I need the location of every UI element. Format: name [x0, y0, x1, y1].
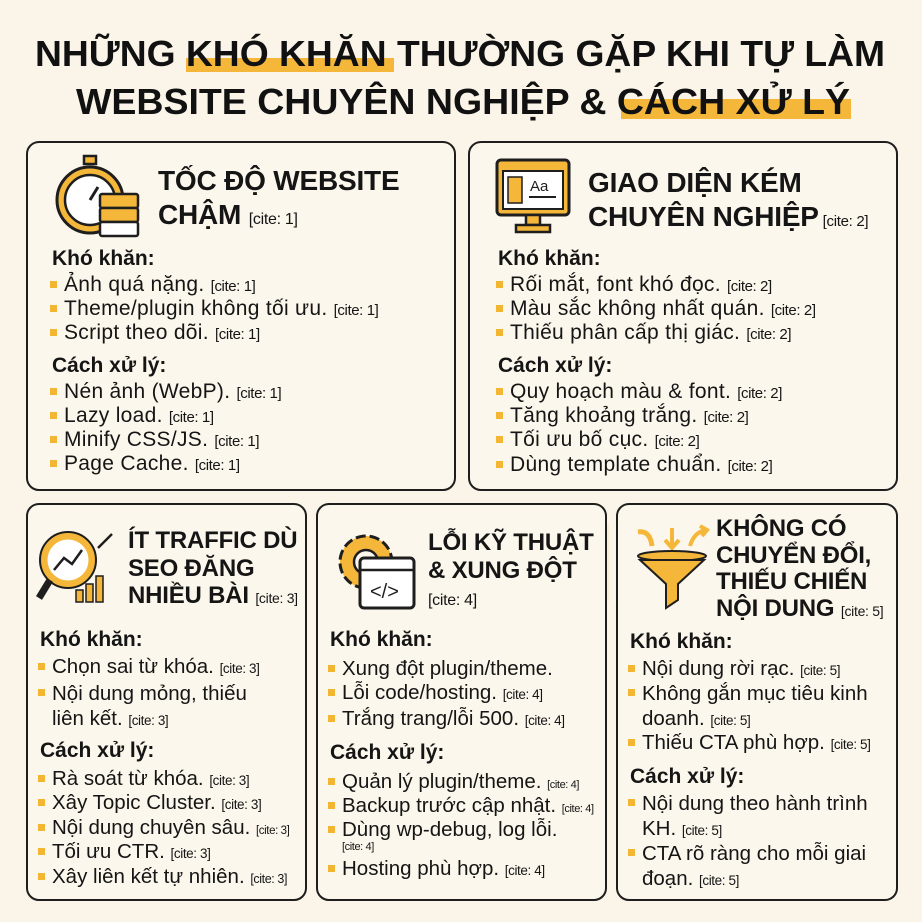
- text block: lỗi kỹ thuật: Lỗi code/hosting. [cite: 4]: [342, 681, 543, 704]
- icon: monitor: [496, 158, 570, 234]
- text block: tốc độ: Khó khăn:: [52, 247, 155, 270]
- text block: tốc độ: Page Cache. [cite: 1]: [64, 452, 240, 475]
- icon: monitor: Aa: [530, 178, 549, 195]
- text block: giao diện: Tối ưu bố cục. [cite: 2]: [510, 428, 699, 451]
- text block: chuyển đổi: [628, 630, 870, 890]
- text block: giao diện: Màu sắc không nhất quán. [cite: 2]: [510, 297, 816, 320]
- text block: giao diện: Tăng khoảng trắng. [cite: 2]: [510, 404, 748, 427]
- text block: chuyển đổi: KH. [cite: 5]: [642, 817, 722, 840]
- heading: traffic: [128, 526, 298, 609]
- heading: giao diện: GIAO DIỆN KÉM: [588, 167, 802, 198]
- text block: giao diện: Khó khăn:: [498, 247, 601, 270]
- text block: chuyển đổi: CTA rõ ràng cho mỗi giai: [642, 842, 866, 865]
- text block: traffic: Cách xử lý:: [40, 739, 154, 762]
- text block: lỗi kỹ thuật: Hosting phù hợp. [cite: 4]: [342, 857, 545, 880]
- text block: giao diện: Rối mắt, font khó đọc. [cite: 2]: [510, 273, 772, 296]
- text block: lỗi kỹ thuật: Dùng wp-debug, log lỗi.: [342, 818, 557, 841]
- text block: traffic: liên kết. [cite: 3]: [52, 707, 168, 730]
- text block: chuyển đổi: Thiếu CTA phù hợp. [cite: 5]: [642, 731, 870, 754]
- text block: traffic: [38, 628, 289, 888]
- text block: chuyển đổi: Khó khăn:: [630, 630, 733, 653]
- heading: giao diện: CHUYÊN NGHIỆP [cite: 2]: [588, 201, 868, 232]
- text block: lỗi kỹ thuật: Khó khăn:: [330, 628, 433, 651]
- panel: tốc độ: [26, 141, 456, 491]
- text block: traffic: Rà soát từ khóa. [cite: 3]: [52, 767, 249, 790]
- text block: chuyển đổi: đoạn. [cite: 5]: [642, 867, 739, 890]
- heading: traffic: NHIỀU BÀI [cite: 3]: [128, 582, 298, 609]
- text block: lỗi kỹ thuật: [328, 628, 594, 880]
- heading: lỗi kỹ thuật: [cite: 4]: [428, 592, 477, 609]
- text block: lỗi kỹ thuật: Backup trước cập nhật. [cite: 4]: [342, 794, 594, 817]
- text block: chuyển đổi: Nội dung rời rạc. [cite: 5]: [642, 657, 840, 680]
- text block: chuyển đổi: Nội dung theo hành trình: [642, 792, 868, 815]
- watermark: LIGHT: [330, 502, 700, 625]
- heading: lỗi kỹ thuật: LỖI KỸ THUẬT: [428, 529, 594, 556]
- text block: lỗi kỹ thuật: Quản lý plugin/theme. [cite: 4]: [342, 770, 579, 793]
- panel: giao diện: [468, 141, 898, 491]
- text block: giao diện: Quy hoạch màu & font. [cite: 2]: [510, 380, 782, 403]
- heading: chuyển đổi: CHUYỂN ĐỔI,: [716, 542, 871, 568]
- text block: tốc độ: Script theo dõi. [cite: 1]: [64, 321, 260, 344]
- heading: traffic: SEO ĐĂNG: [128, 554, 254, 582]
- panel: traffic: [26, 503, 307, 901]
- heading: chuyển đổi: KHÔNG CÓ: [716, 515, 846, 542]
- text block: tốc độ: Minify CSS/JS. [cite: 1]: [64, 428, 259, 451]
- text block: tốc độ: Lazy load. [cite: 1]: [64, 404, 214, 427]
- text block: tốc độ: Ảnh quá nặng. [cite: 1]: [64, 273, 255, 296]
- heading: tốc độ: TỐC ĐỘ WEBSITE: [158, 165, 399, 196]
- text block: traffic: Tối ưu CTR. [cite: 3]: [52, 840, 210, 863]
- heading: chuyển đổi: [716, 514, 883, 622]
- text block: chuyển đổi: Cách xử lý:: [630, 765, 744, 788]
- text block: lỗi kỹ thuật: [cite: 4]: [342, 841, 374, 853]
- text block: traffic: Nội dung chuyên sâu. [cite: 3]: [52, 816, 289, 839]
- text block: chuyển đổi: doanh. [cite: 5]: [642, 707, 750, 730]
- heading: lỗi kỹ thuật: & XUNG ĐỘT: [428, 556, 577, 584]
- title: [35, 32, 885, 122]
- text block: giao diện: [496, 247, 816, 476]
- heading: tốc độ: [158, 165, 399, 230]
- text block: giao diện: Thiếu phân cấp thị giác. [cite: 2]: [510, 321, 791, 344]
- text block: tốc độ: Cách xử lý:: [52, 354, 166, 377]
- text block: lỗi kỹ thuật: Cách xử lý:: [330, 741, 444, 764]
- icon: gear code: </>: [370, 581, 399, 603]
- text block: traffic: Chọn sai từ khóa. [cite: 3]: [52, 655, 260, 678]
- heading: giao diện: [588, 167, 868, 232]
- icon: gear code: [338, 534, 416, 610]
- panel: lỗi kỹ thuật: [316, 503, 607, 901]
- title: NHỮNG KHÓ KHĂN THƯỜNG GẶP KHI TỰ LÀM: [35, 32, 885, 74]
- text block: traffic: Xây Topic Cluster. [cite: 3]: [52, 791, 261, 814]
- icon: funnel: [637, 524, 710, 610]
- panel: chuyển đổi: [616, 503, 898, 901]
- text block: traffic: Xây liên kết tự nhiên. [cite: 3]: [52, 865, 287, 888]
- text block: traffic: Khó khăn:: [40, 628, 143, 651]
- heading: traffic: ÍT TRAFFIC DÙ: [128, 527, 297, 554]
- text block: tốc độ: [50, 247, 378, 475]
- icon: stopwatch: [56, 154, 140, 238]
- title: WEBSITE CHUYÊN NGHIỆP & CÁCH XỬ LÝ: [76, 80, 850, 122]
- heading: chuyển đổi: NỘI DUNG [cite: 5]: [716, 594, 883, 622]
- text block: giao diện: Dùng template chuẩn. [cite: 2]: [510, 453, 772, 476]
- text block: giao diện: Cách xử lý:: [498, 354, 612, 377]
- text block: lỗi kỹ thuật: Xung đột plugin/theme.: [342, 657, 553, 680]
- text block: traffic: Nội dung mỏng, thiếu: [52, 682, 247, 705]
- text block: tốc độ: Theme/plugin không tối ưu. [cite: 1]: [64, 297, 378, 320]
- heading: lỗi kỹ thuật: [428, 528, 594, 609]
- heading: tốc độ: CHẬM [cite: 1]: [158, 199, 298, 230]
- icon: magnifier chart: [36, 531, 113, 603]
- text block: tốc độ: Nén ảnh (WebP). [cite: 1]: [64, 380, 281, 403]
- text block: chuyển đổi: Không gắn mục tiêu kinh: [642, 682, 868, 705]
- text block: lỗi kỹ thuật: Trắng trang/lỗi 500. [cite: 4]: [342, 707, 565, 730]
- heading: chuyển đổi: THIẾU CHIẾN: [716, 568, 867, 595]
